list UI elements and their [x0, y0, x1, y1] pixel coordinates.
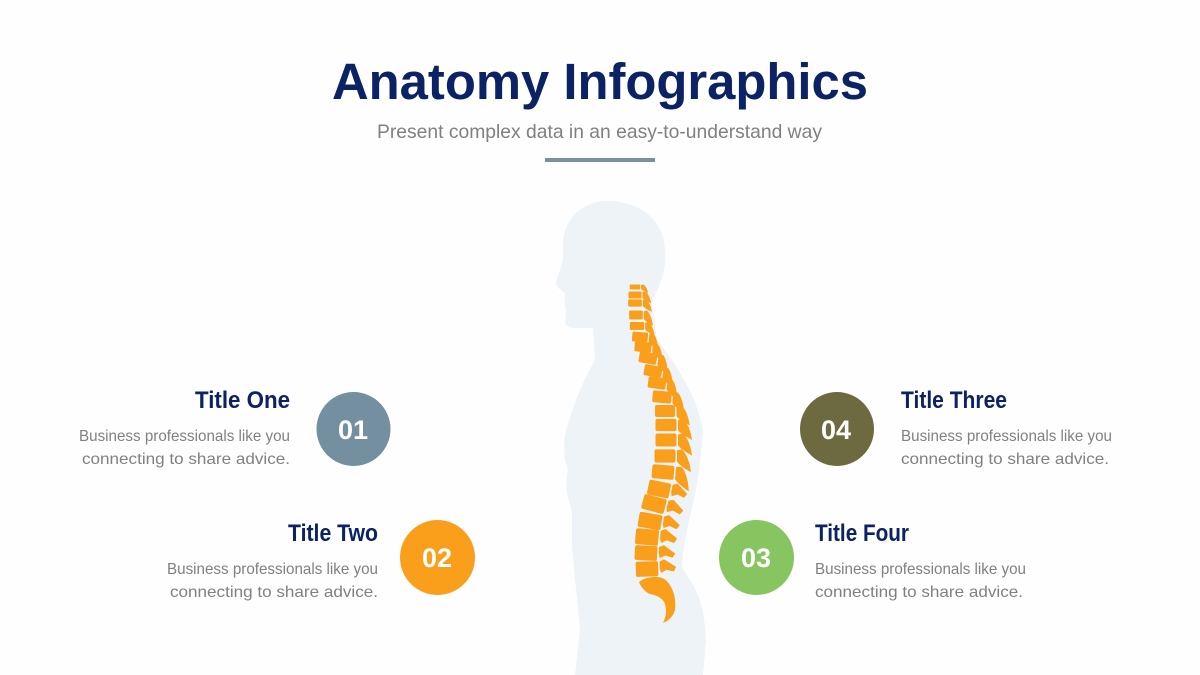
item 04: title three: connecting to share advice. [901, 451, 1109, 468]
subtitle: Present complex data in an easy-to-understand way [377, 121, 822, 143]
human silhouette [556, 201, 706, 675]
item 01: title one [79, 387, 390, 468]
title underline [545, 158, 655, 162]
item 02: title two [167, 520, 475, 601]
item 02: title two: 02 [422, 543, 452, 573]
title: Anatomy Infographics [332, 53, 868, 110]
cervical vertebrae [628, 285, 664, 361]
item 01: title one: connecting to share advice. [82, 451, 290, 468]
item 03: title four: Business professionals like you [815, 561, 1026, 578]
item 03: title four: connecting to share advice. [815, 584, 1023, 601]
spine [628, 285, 692, 623]
item 03: title four: 03 [741, 543, 771, 573]
item 04: title three: 04 [821, 415, 851, 445]
item 04: title three: Title Three [901, 387, 1007, 414]
item 02: title two: Business professionals like you [167, 561, 378, 578]
item 02: title two: connecting to share advice. [170, 584, 378, 601]
item 03: title four: Title Four [815, 520, 909, 547]
item 01: title one: Business professionals like you [79, 428, 290, 445]
item 01: title one: 01 [338, 415, 368, 445]
item 02: title two: Title Two [288, 520, 378, 547]
lumbar vertebrae [634, 478, 688, 577]
item 04: title three [800, 387, 1112, 468]
thoracic vertebrae [637, 351, 692, 491]
sacrum [639, 577, 675, 623]
item 01: title one: Title One [195, 387, 290, 414]
item 04: title three: Business professionals like you [901, 428, 1112, 445]
item 03: title four [719, 520, 1026, 601]
